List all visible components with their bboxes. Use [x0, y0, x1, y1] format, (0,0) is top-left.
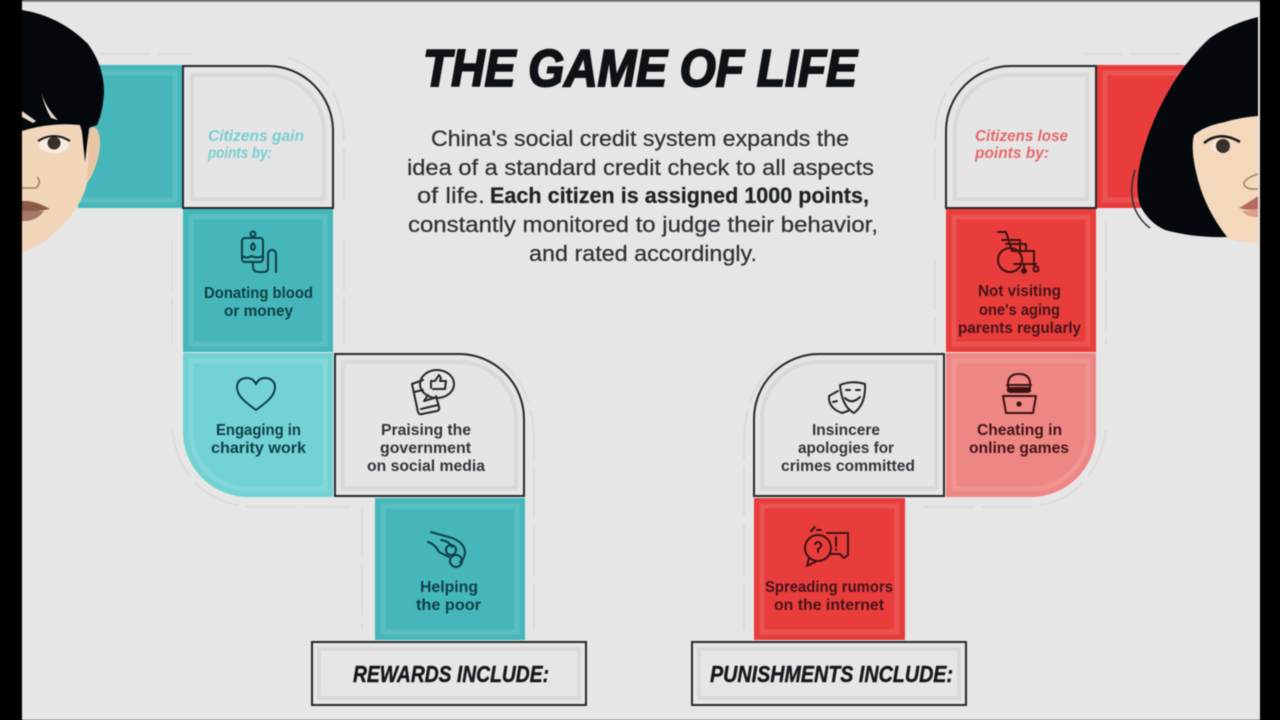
tile: red start: [1097, 65, 1200, 208]
tile: insincere apologies for crimes committed: apologies for: [798, 440, 894, 457]
icon: hand with coin: [428, 532, 465, 567]
intro text block: and rated accordingly.: [529, 241, 757, 266]
tile: citizens lose points by: [946, 66, 1096, 208]
tile: cheating in online games: online games: [969, 440, 1069, 457]
tile: praising the government on social media: [335, 354, 524, 496]
tile: not visiting aging parents: Not visiting: [978, 283, 1061, 300]
intro text block: [407, 126, 878, 266]
tile: helping the poor: the poor: [416, 597, 481, 614]
tile: teal start: [70, 65, 183, 208]
tile: engaging in charity work: [183, 353, 333, 497]
box: punishments include: [692, 642, 966, 705]
box: punishments include: PUNISHMENTS INCLUDE:: [710, 661, 953, 687]
tile: not visiting aging parents: one's aging: [979, 302, 1060, 319]
tile: not visiting aging parents: [946, 209, 1096, 352]
tile: spreading rumors on the internet: Spreading rumors: [765, 579, 893, 596]
icon: woman's face: [1132, 17, 1258, 243]
tile: cheating in online games: Cheating in: [977, 422, 1062, 439]
tile: insincere apologies for crimes committed: crimes committed: [781, 458, 915, 475]
tile: not visiting aging parents: parents regularly: [958, 320, 1081, 337]
icon: blood bag: [242, 232, 276, 272]
icon: heart: [237, 378, 275, 410]
tile: citizens lose points by: Citizens lose: [975, 128, 1068, 145]
tile: donating blood or money: [183, 209, 333, 352]
tile: spreading rumors on the internet: on the internet: [774, 597, 884, 614]
box: rewards include: [312, 642, 586, 705]
intro text block: China's social credit system expands the: [431, 126, 849, 151]
intro text block: idea of a standard credit check to all aspects: [407, 155, 874, 180]
tile: citizens gain points by: [183, 66, 333, 208]
tile: spreading rumors on the internet: [754, 498, 905, 640]
tile: insincere apologies for crimes committed: [754, 354, 944, 496]
tile: engaging in charity work: charity work: [211, 440, 306, 457]
tile: helping the poor: Helping: [420, 579, 478, 596]
tile: cheating in online games: [946, 353, 1096, 497]
panel: citizens lose points path: [692, 65, 1200, 705]
intro text block: Each citizen is assigned 1000 points,: [490, 183, 869, 208]
icon: man's face: [22, 10, 104, 252]
icon: hacker at laptop: [1003, 374, 1036, 413]
tile: donating blood or money: Donating blood: [204, 285, 313, 302]
tile: helping the poor: [375, 498, 525, 640]
tile: citizens gain points by: points by:: [207, 145, 272, 162]
intro text block: constantly monitored to judge their behavior,: [408, 212, 878, 237]
title: THE GAME OF LIFE: [423, 40, 858, 98]
tile: donating blood or money: or money: [224, 303, 293, 320]
icon: theatre masks: [829, 382, 865, 413]
box: rewards include: REWARDS INCLUDE:: [353, 661, 549, 687]
tile: citizens lose points by: points by:: [974, 145, 1049, 162]
icon: phone with thumbs-up bubble: [412, 370, 454, 414]
tile: engaging in charity work: Engaging in: [216, 422, 301, 439]
tile: citizens gain points by: Citizens gain: [208, 128, 304, 145]
icon: speech bubbles: [805, 527, 848, 566]
panel: citizens gain points path: [70, 65, 586, 705]
tile: praising the government on social media: on social media: [367, 458, 485, 475]
tile: praising the government on social media: Praising the: [381, 422, 471, 439]
icon: wheelchair: [998, 232, 1038, 273]
tile: insincere apologies for crimes committed: Insincere: [812, 422, 880, 439]
tile: praising the government on social media: government: [380, 440, 471, 457]
intro text block: of life.: [417, 183, 485, 208]
